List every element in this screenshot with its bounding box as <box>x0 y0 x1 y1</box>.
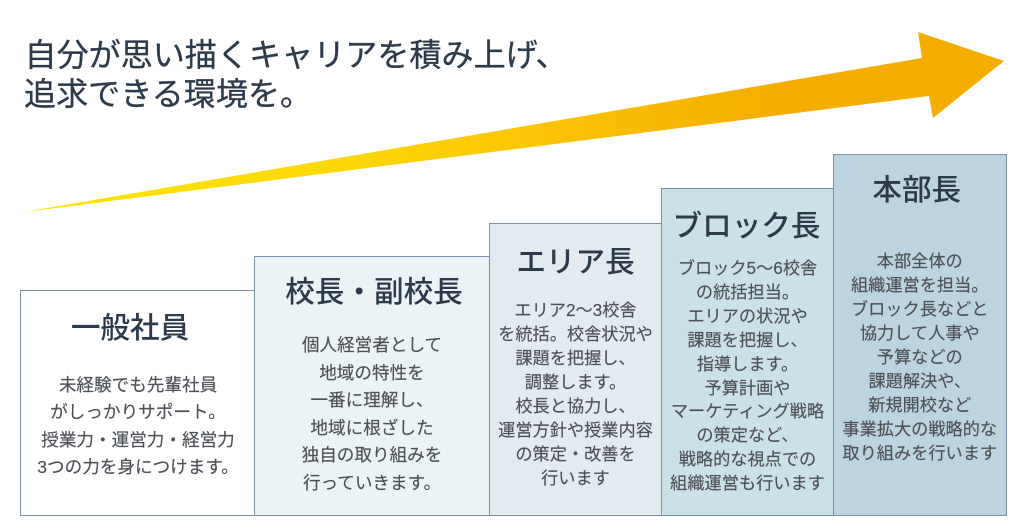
heading: 一般社員: 一般社員 <box>71 312 189 344</box>
text: エリア長 description: 行います <box>541 468 610 488</box>
text: 一般社員 description: がしっかりサポート。 <box>50 402 226 422</box>
panel: 校長・副校長 <box>254 256 490 516</box>
text: 一般社員 description: 3つの力を身につけます。 <box>37 457 239 477</box>
text: エリア長 description: 課題を把握し、 <box>515 348 636 368</box>
title: 自分が思い描くキャリアを積み上げ、 <box>24 37 568 73</box>
text: ブロック長 description: 予算計画や <box>705 378 790 398</box>
text: エリア長 description: 校長と協力し、 <box>515 396 636 416</box>
text: 本部長 description: 事業拡大の戦略的な <box>842 418 997 438</box>
text: 本部長 description: 取り組みを行います <box>842 442 997 462</box>
text: 校長・副校長 description <box>302 335 442 493</box>
text: ブロック長 description: エリアの状況や <box>687 306 808 326</box>
text: 校長・副校長 description: 個人経営者として <box>302 335 442 355</box>
text: ブロック長 description: 戦略的な視点での <box>679 449 816 469</box>
text: 校長・副校長 description: 一番に理解し、 <box>310 390 434 410</box>
text: エリア長 description <box>498 300 653 488</box>
text: ブロック長 description: 課題を把握し、 <box>687 330 808 350</box>
text: 本部長 description <box>842 250 997 462</box>
text: 本部長 description: 課題解決や、 <box>868 370 971 390</box>
text: 一般社員 description <box>37 374 239 477</box>
text: エリア長 description: の策定・改善を <box>515 444 636 464</box>
text: ブロック長 description: マーケティング戦略 <box>671 401 824 421</box>
panel: エリア長 <box>489 223 662 516</box>
title: 追求できる環境を。 <box>24 76 312 112</box>
text: エリア長 description: 調整します。 <box>525 372 626 392</box>
panel: ブロック長 <box>661 188 834 516</box>
heading: ブロック長: ブロック長 <box>673 210 820 243</box>
text: 校長・副校長 description: 地域に根ざした <box>310 418 434 438</box>
text: 一般社員 description: 授業力・運営力・経営力 <box>41 430 235 450</box>
text: エリア長 description: エリア2〜3校舎 <box>514 300 637 320</box>
text: 校長・副校長 description: 行っていきます。 <box>303 473 441 493</box>
title <box>24 37 568 112</box>
text: 本部長 description: 組織運営を担当。 <box>851 274 988 294</box>
text: ブロック長 description: 組織運営も行います <box>670 473 825 493</box>
heading: 校長・副校長: 校長・副校長 <box>285 276 463 309</box>
text: 校長・副校長 description: 地域の特性を <box>319 363 425 383</box>
text: ブロック長 description: の策定など、 <box>696 425 799 445</box>
text: ブロック長 description: の統括担当。 <box>696 282 799 302</box>
panel: 一般社員 <box>20 290 256 516</box>
text: 本部長 description: 協力して人事や <box>860 322 980 342</box>
text: ブロック長 description: ブロック5〜6校舎 <box>678 258 817 278</box>
text: エリア長 description: 運営方針や授業内容 <box>498 420 653 440</box>
text: エリア長 description: を統括。校舎状況や <box>498 324 653 344</box>
heading: 本部長: 本部長 <box>872 174 961 206</box>
text: ブロック長 description: 指導します。 <box>697 354 798 374</box>
text: 本部長 description: 新規開校など <box>868 394 971 414</box>
text: 本部長 description: 予算などの <box>877 346 963 366</box>
panel: 本部長 <box>833 154 1006 516</box>
text: 本部長 description: 本部全体の <box>877 250 963 270</box>
text: ブロック長 description <box>670 258 825 493</box>
text: 一般社員 description: 未経験でも先輩社員 <box>59 374 217 394</box>
text: 校長・副校長 description: 独自の取り組みを <box>302 445 442 465</box>
text: 本部長 description: ブロック長などと <box>851 298 988 318</box>
heading: エリア長: エリア長 <box>516 246 635 279</box>
